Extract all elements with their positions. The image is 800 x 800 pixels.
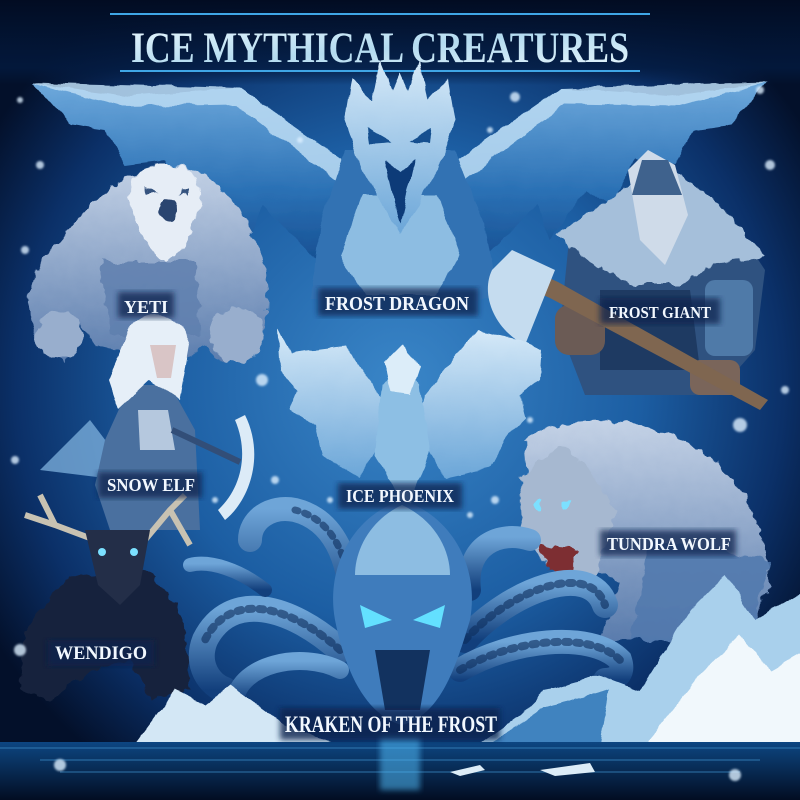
creature: ice phoenix bbox=[278, 328, 542, 515]
creature: frost dragon bbox=[32, 60, 768, 300]
yeti head bbox=[131, 165, 200, 262]
dragon head bbox=[345, 60, 455, 235]
creature: kraken bbox=[190, 500, 621, 725]
giant fur mantle bbox=[555, 175, 765, 285]
wolf body bbox=[525, 421, 768, 640]
wendigo head bbox=[85, 530, 150, 605]
label: snow elf: SNOW ELF bbox=[107, 475, 195, 495]
wendigo body bbox=[20, 570, 190, 700]
elf hair bbox=[108, 314, 190, 410]
title: ICE MYTHICAL CREATURES bbox=[131, 25, 629, 72]
giant armour bbox=[560, 195, 765, 395]
kraken eyes bbox=[360, 605, 445, 628]
icebergs bbox=[130, 570, 800, 750]
giant head bbox=[628, 150, 688, 265]
label: ice phoenix: ICE PHOENIX bbox=[346, 486, 454, 506]
title banner bbox=[0, 0, 800, 85]
creature: frost giant bbox=[488, 150, 768, 410]
creature: yeti bbox=[30, 165, 267, 365]
label: snow elf bbox=[98, 472, 202, 498]
phoenix right wing bbox=[418, 330, 542, 478]
wolf head bbox=[520, 445, 615, 590]
label: wendigo: WENDIGO bbox=[55, 643, 147, 664]
phoenix left wing bbox=[278, 328, 388, 478]
elf face bbox=[150, 345, 176, 378]
yeti fists bbox=[36, 311, 84, 359]
label: frost giant: FROST GIANT bbox=[609, 303, 712, 322]
frozen sea bbox=[0, 735, 800, 800]
creature: snow elf bbox=[40, 314, 254, 530]
label: yeti bbox=[118, 292, 174, 318]
dragon body bbox=[312, 150, 500, 300]
creature: tundra wolf bbox=[520, 421, 770, 640]
label: frost dragon: FROST DRAGON bbox=[325, 293, 469, 315]
dragon right wing bbox=[450, 82, 768, 262]
phoenix body bbox=[375, 362, 430, 515]
elf body bbox=[95, 385, 200, 530]
yeti body bbox=[30, 165, 267, 365]
label: kraken of the frost: KRAKEN OF THE FROST bbox=[285, 712, 497, 737]
giant arms bbox=[705, 280, 753, 356]
elf cape bbox=[40, 420, 128, 478]
label: kraken of the frost bbox=[280, 708, 500, 740]
giant axe bbox=[520, 265, 768, 410]
kraken tentacles bbox=[190, 509, 621, 700]
dragon left wing bbox=[32, 82, 350, 262]
creature: wendigo bbox=[20, 495, 190, 700]
label: tundra wolf: TUNDRA WOLF bbox=[607, 534, 731, 554]
label: yeti: YETI bbox=[124, 297, 168, 317]
elf bow bbox=[218, 415, 254, 520]
label: frost giant bbox=[600, 298, 720, 324]
kraken head bbox=[333, 500, 472, 725]
wendigo antlers bbox=[25, 495, 190, 545]
label: ice phoenix bbox=[338, 483, 462, 509]
